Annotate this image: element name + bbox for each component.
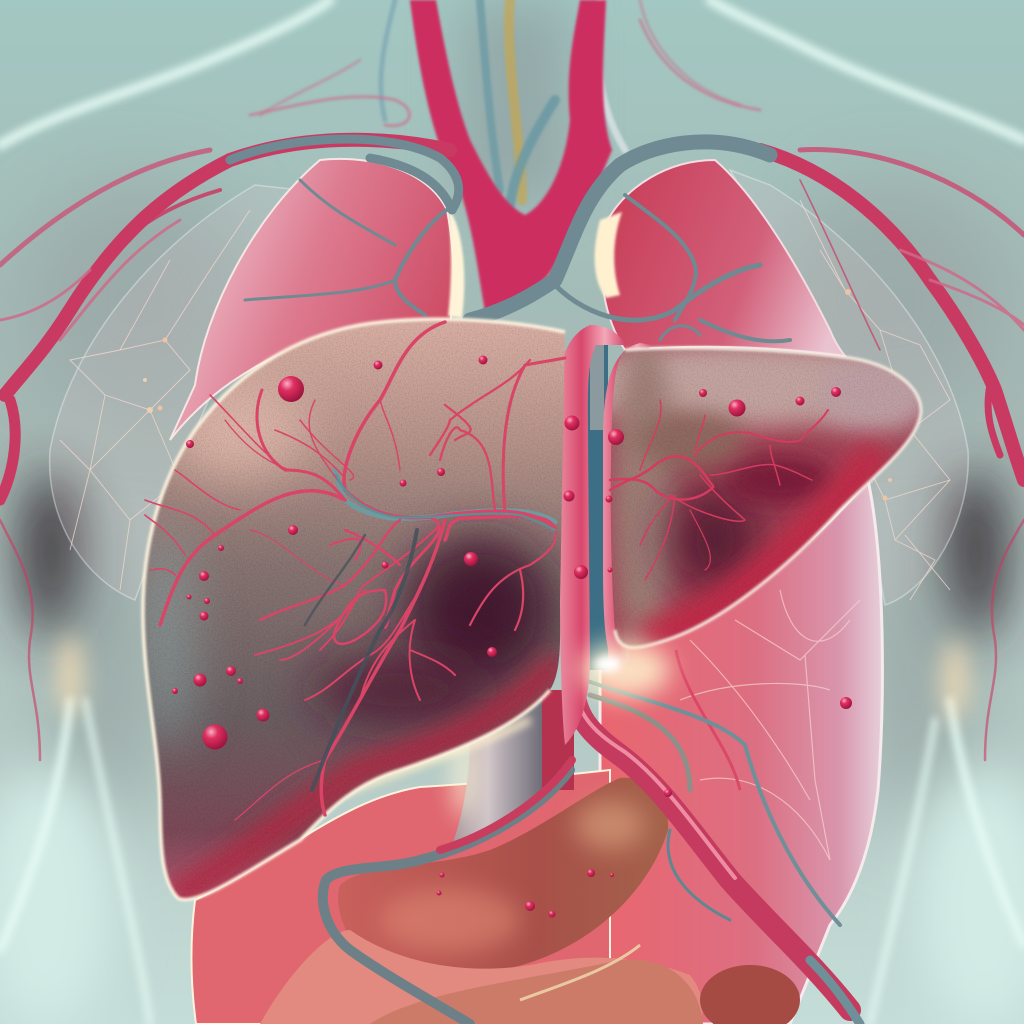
- translucent chest envelope left: [50, 185, 300, 600]
- central bile duct column: [558, 325, 652, 745]
- translucent chest envelope right: [730, 170, 968, 605]
- stomach: [338, 778, 668, 970]
- grey tube behind liver: [452, 700, 542, 845]
- central bright flare: [580, 642, 670, 698]
- network: right constellation: [800, 200, 950, 600]
- main vessels: grey veins over lobes: [230, 139, 790, 341]
- liver: left lobe bead lesions: [172, 356, 497, 750]
- warm glow under liver: [340, 720, 530, 820]
- main vessels: arms crimson: [0, 140, 1024, 760]
- bottom organs: [260, 930, 800, 1024]
- lower left organ: [191, 770, 610, 1024]
- liver: right lobe bead lesions: [564, 387, 841, 797]
- lower vessels and grey bile duct: [323, 670, 860, 1024]
- upper organ: right lobe: [601, 160, 845, 356]
- warm side glows: [58, 635, 967, 720]
- liver: left lobe vessels: [145, 322, 565, 820]
- glow gaps beside the heart: [448, 208, 622, 318]
- liver: right lobe vessels: [610, 400, 828, 580]
- lower right organ: [600, 480, 882, 1024]
- red wall beside tube: [542, 690, 574, 790]
- network: left constellation: [60, 210, 250, 590]
- upper organ: left lobe: [170, 159, 453, 440]
- central neck vessels: [250, 0, 760, 205]
- liver: left lobe: [135, 310, 570, 910]
- central heart vessel mass: [410, 0, 612, 312]
- liver: right lobe: [610, 344, 924, 650]
- liver: left lobe grey-teal vein overlays: [305, 475, 555, 790]
